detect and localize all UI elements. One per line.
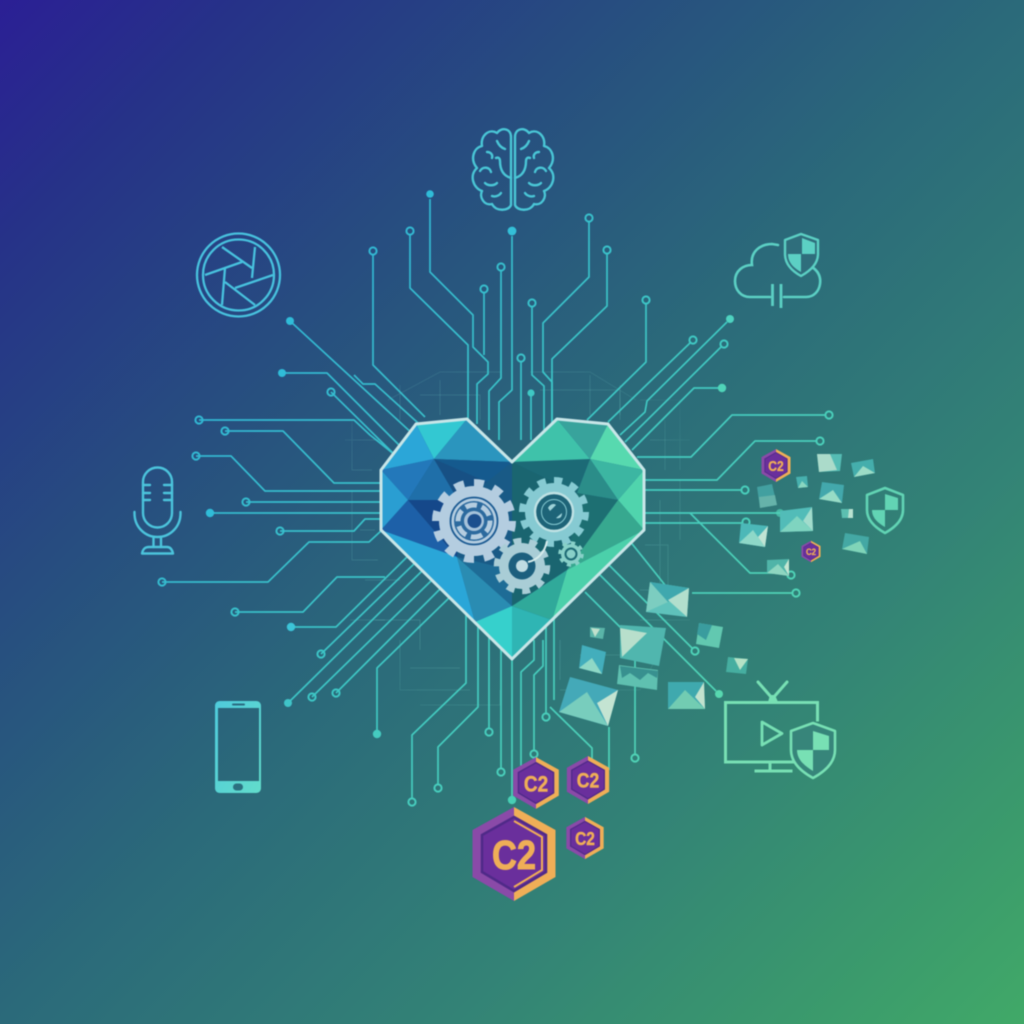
icon: microphone [134, 468, 181, 554]
circuit nodes: top [369, 190, 611, 397]
heart right facets [512, 419, 644, 659]
C2 hexagon badge right lower: C2 [806, 546, 816, 557]
C2 hexagon badge lower right [566, 817, 604, 859]
medium gear [523, 481, 585, 543]
circuit nodes: right [642, 296, 833, 698]
scattered envelopes lower [559, 582, 748, 726]
C2 hexagon badge right upper: C2 [768, 459, 784, 475]
icon: smartphone [215, 701, 261, 793]
icon: brain [473, 129, 553, 210]
C2 hexagon badge right upper [761, 449, 791, 482]
scattered envelopes right [739, 454, 875, 576]
tiny gear [560, 543, 582, 565]
heart outline [381, 419, 644, 659]
C2 hexagon badge upper left [513, 757, 559, 809]
circuit traces: right [585, 304, 825, 691]
circuit nodes: bottom [408, 713, 639, 806]
C2 hexagon badge upper left: C2 [524, 771, 548, 796]
C2 hexagon badge right lower [801, 541, 821, 562]
C2 hexagon badge large: C2 [492, 832, 536, 878]
C2 hexagon badge large [472, 807, 556, 901]
circuit traces: left [162, 321, 450, 734]
small gear [497, 541, 547, 591]
heart left facets [381, 419, 512, 659]
heart [381, 419, 644, 659]
icon: television with shield [726, 682, 835, 778]
icon: shield right [867, 488, 903, 533]
icon: camera shutter [197, 234, 280, 316]
circuit traces: bottom [412, 605, 635, 800]
circuit traces: top [373, 199, 607, 440]
C2 hexagon badge lower right: C2 [575, 828, 595, 849]
C2 hexagon badge upper right [567, 756, 609, 804]
C2 hexagon badge upper right: C2 [577, 770, 599, 793]
heart base [381, 419, 644, 659]
circuit nodes: left [158, 317, 381, 738]
large gear [437, 484, 511, 558]
icon: cloud with shield [735, 234, 820, 308]
faint circuit board behind heart [345, 372, 690, 705]
